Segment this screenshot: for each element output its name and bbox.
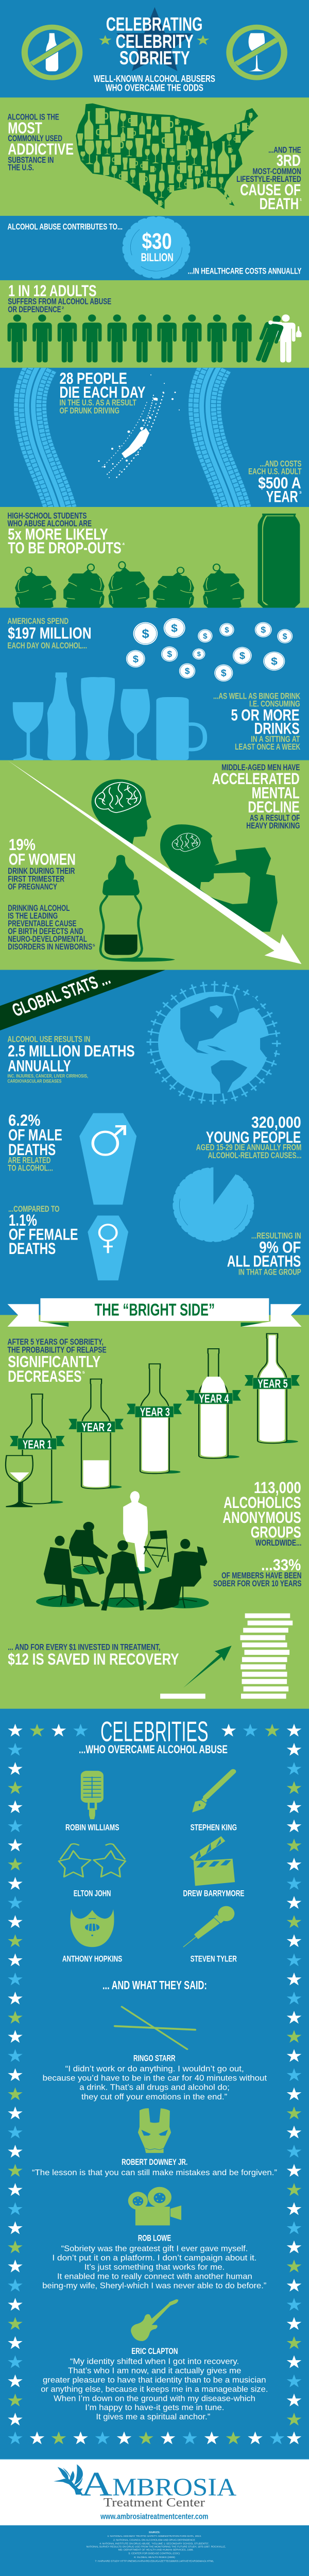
label: Drew Barrymore: DREW BARRYMORE — [183, 1888, 244, 1898]
panel: sources — [0, 2526, 309, 2576]
panel: healthcare costs — [0, 216, 309, 280]
quote: Eric Clapton — [41, 2346, 268, 2421]
text: 1 in 12 adults: 2 — [62, 306, 64, 310]
text: birth defects — [8, 903, 95, 952]
panel: celebrities — [0, 1709, 309, 2459]
text: male deaths: DEATHS — [8, 1140, 56, 1159]
icon: falling coins: $ — [167, 649, 173, 659]
icon: falling coins: $ — [197, 651, 201, 657]
text: 1 in 12 adults — [8, 281, 111, 314]
icon: microphone — [183, 1906, 234, 1947]
quote: Eric Clapton: ERIC CLAPTON — [131, 2346, 178, 2355]
text: 19 percent of women: DRINK DURING THEIR — [8, 866, 75, 876]
icon: falling coins: $ — [171, 622, 178, 635]
panel: header — [0, 0, 309, 97]
chart: bottle year 3 — [127, 1364, 182, 1473]
panel: logo — [0, 2459, 309, 2526]
quote: Rob Lowe: ROB LOWE — [138, 2233, 171, 2243]
text: most addictive: ADDICTIVE — [8, 140, 74, 158]
icon: vintage microphone — [81, 1771, 104, 1819]
label: Stephen King: STEPHEN KING — [191, 1823, 237, 1832]
arrow: mental decline — [8, 760, 301, 964]
label: Anthony Hopkins: ANTHONY HOPKINS — [62, 1954, 122, 1963]
quote: Rob Lowe: It enabled me to really connect with another human — [57, 2272, 252, 2281]
text: female deaths: DEATHS — [9, 1239, 56, 1258]
text: $197 million: EACH DAY ON ALCOHOL... — [8, 641, 87, 650]
icon: drinking head with small brain and bottle — [160, 824, 278, 931]
banner: the bright side: THE “BRIGHT SIDE” — [95, 1300, 215, 1319]
text: drop-outs: WHO ABUSE ALCOHOL ARE — [8, 518, 92, 528]
text: drop-outs: TO BE DROP-OUTS — [8, 538, 122, 557]
text: sources: 1: NATIONAL HIGHWAY TRAFFIC SAFETY ADMINISTRATION FARS DATA, 2013. — [108, 2535, 201, 2538]
quote: Eric Clapton: greater pleasure to have that identity than to be a musician — [43, 2375, 266, 2384]
icon: tire tracks — [30, 364, 235, 510]
text: most addictive — [8, 112, 74, 172]
text: most addictive: MOST — [8, 118, 42, 137]
chart: bottle year 5 — [245, 1334, 300, 1443]
text: 2.5 million deaths: CARDIOVASCULAR DISEASES — [8, 1079, 61, 1084]
icon: falling coins: $ — [203, 632, 208, 640]
panel: one in twelve adults — [0, 280, 309, 368]
icon: male coffin — [79, 1113, 136, 1205]
banner: the bright side — [8, 1298, 301, 1327]
text: website: www.ambrosiatreatmentcenter.com — [100, 2512, 208, 2521]
text: sources: 7: HARVARD STUDY HTTP://NEWS.HARVARD.EDU/GAZETTE/1996/03.14/FIVEYEARSISMAGI.HTML — [95, 2560, 214, 2563]
text: nine percent — [227, 1231, 301, 1277]
text: 19 percent of women: OF WOMEN — [9, 850, 76, 868]
panel: spending and binge drinking — [0, 608, 309, 760]
text: 19 percent of women: 19% — [9, 835, 36, 854]
text: accelerated mental decline — [212, 762, 300, 830]
text: female deaths: 1.1% — [9, 1211, 37, 1229]
text: drop-outs: 4 — [122, 542, 125, 546]
text: sources: 4: NATIONAL INSTITUTE ON DRUG ABUSE. “VOLUME 1: SECONDARY SCHOOL STUDENTS”, — [99, 2543, 210, 2545]
quote: Ringo Starr: a drink. That’s all drugs and alcohol do; — [79, 2083, 230, 2092]
text: 28 people die each day: OF DRUNK DRIVING — [60, 405, 119, 415]
icon: Iron Man mask — [138, 2108, 171, 2153]
frame of stars — [8, 1724, 301, 2444]
icon: broken glass splatter — [98, 375, 180, 478]
quote: Rob Lowe: “Sobriety was the greatest gift I ever gave myself. — [61, 2244, 248, 2253]
text: probability of relapse: DECREASES — [8, 1367, 81, 1385]
text: 1 in 12 adults: 1 IN 12 ADULTS — [8, 281, 96, 300]
text: birth defects: 5 — [93, 943, 95, 947]
icon: baby bottle — [100, 855, 175, 962]
text: 19 percent of women — [8, 835, 76, 891]
icon: falling coins: $ — [239, 651, 245, 662]
quote: Eric Clapton: “My identity shifted when I got into recovery. — [70, 2357, 239, 2366]
text: alcoholics anonymous — [222, 1478, 301, 1548]
chart: US map of drinks — [76, 104, 258, 209]
chart: bottle year 2: YEAR 2 — [81, 1420, 112, 1434]
text: $197 million: AMERICANS SPEND — [8, 616, 68, 625]
text: male deaths: TO ALCOHOL... — [8, 1163, 53, 1173]
text: most addictive: ALCOHOL IS THE — [8, 112, 59, 122]
text: 28 people die each day: IN THE U.S. AS A RESULT — [60, 398, 136, 408]
text: probability of relapse: SIGNIFICANTLY — [8, 1352, 100, 1371]
icon: crushed cans — [15, 562, 244, 608]
text: 2.5 million deaths — [8, 1035, 135, 1084]
icon: falling coins: $ — [271, 655, 278, 667]
icon: clapperboard — [190, 1836, 235, 1886]
text: 2.5 million deaths: INC. INJURIES, CANCER, LIVER CIRRHOSIS, — [8, 1074, 88, 1079]
text: drop-outs: 5x MORE LIKELY — [8, 524, 108, 543]
text: male deaths: OF MALE — [8, 1125, 62, 1144]
text: female deaths: ...COMPARED TO — [8, 1204, 60, 1214]
text: $30 billion — [141, 228, 174, 264]
quote: Ringo Starr: “I didn’t work or do anything. I wouldn’t go out, — [65, 2064, 244, 2073]
panel: global stats — [0, 968, 309, 1315]
text: probability of relapse — [8, 1337, 107, 1385]
text: most addictive: SUBSTANCE IN — [8, 155, 54, 165]
text: savings in recovery: ... AND FOR EVERY $1 INVESTED IN TREATMENT, — [8, 1642, 160, 1652]
subtitle: WELL-KNOWN ALCOHOL ABUSERS — [94, 74, 215, 84]
text: sources: MD: DEPARTMENT OF HEALTH AND HUMAN SERVICES, 1998. — [118, 2549, 194, 2551]
banner: global stats: GLOBAL STATS ... — [9, 968, 113, 1021]
text: sources: SOURCES: — [149, 2531, 160, 2534]
subtitle: WHO OVERCAME THE ODDS — [106, 82, 203, 93]
icon: falling coins: $ — [185, 666, 190, 676]
text: contributes to: ALCOHOL ABUSE CONTRIBUTES TO... — [8, 222, 123, 231]
quote: Robert Downey Jr.: ROBERT DOWNEY JR. — [122, 2157, 187, 2166]
icon: film camera — [128, 2187, 181, 2225]
icon: no bottle sign — [25, 27, 79, 78]
text: 19 percent of women: FIRST TRIMESTER — [8, 874, 64, 884]
icon: support group silhouettes — [36, 1491, 209, 1611]
icon: row of drinks — [13, 672, 205, 760]
text: $500 a year: 3 — [299, 490, 302, 495]
icon: hummingbird — [54, 2464, 83, 2495]
title — [106, 13, 202, 69]
icon: falling coins — [126, 618, 293, 682]
text: female deaths: OF FEMALE — [9, 1225, 78, 1244]
icon: falling coins: $ — [261, 625, 266, 635]
text: 2.5 million deaths: ALCOHOL USE RESULTS IN — [8, 1035, 90, 1044]
text: most addictive: THE U.S. — [8, 163, 34, 172]
quote: Eric Clapton: That’s who I am now, and it actually gives me — [68, 2366, 241, 2375]
text: binge drinking — [213, 691, 301, 752]
text: probability of relapse: 5 — [82, 1370, 85, 1375]
icon: no wine glass sign — [229, 27, 284, 78]
arrow: growth — [183, 1646, 232, 1688]
title: CELEBRATING — [106, 13, 202, 35]
text: birth defects: PREVENTABLE CAUSE — [8, 919, 76, 928]
icon: wine glass — [6, 1455, 33, 1507]
text: male deaths — [8, 1111, 62, 1173]
text: thirty-three percent — [213, 1555, 301, 1588]
text: birth defects: IS THE LEADING — [8, 911, 58, 921]
text: female deaths — [8, 1204, 78, 1258]
quote: Rob Lowe: being-my wife, Sheryl-which I was never able to do before.” — [42, 2281, 267, 2290]
text: savings in recovery: $12 IS SAVED IN RECOVERY — [8, 1650, 179, 1668]
label: Robin Williams: ROBIN WILLIAMS — [65, 1823, 119, 1832]
quote: Robert Downey Jr. — [32, 2157, 277, 2177]
panel: drunk driving — [0, 364, 309, 510]
subtitle — [94, 74, 215, 93]
text: $500 a year — [248, 459, 302, 506]
icon: star glasses — [59, 1844, 126, 1877]
quote: Ringo Starr: RINGO STARR — [133, 2053, 176, 2063]
text: probability of relapse: THE PROBABILITY OF RELAPSE — [8, 1345, 107, 1354]
text: birth defects: NEURO-DEVELOPMENTAL — [8, 934, 87, 944]
quote: Robert Downey Jr.: “The lesson is that you can still make mistakes and be forgiven.” — [32, 2168, 277, 2177]
icon: electric guitar — [131, 2299, 178, 2341]
text: 2.5 million deaths: 2.5 MILLION DEATHS — [8, 1041, 135, 1060]
quote: Eric Clapton: or anything else, because it keeps me in a manageable size. — [41, 2384, 268, 2394]
text: sources: 5: CENTER FOR DISEASE CONTROL (CDC) — [128, 2552, 180, 2555]
logo: Ambrosia Treatment Center: Treatment Center — [104, 2495, 205, 2509]
text: birth defects: DRINKING ALCOHOL — [8, 903, 70, 913]
quote: Eric Clapton: It gives me a spiritual anchor.” — [96, 2412, 211, 2421]
chart: bottle year 1 — [10, 1394, 65, 1504]
title: CELEBRITY — [116, 30, 194, 52]
quote: Rob Lowe — [42, 2233, 267, 2290]
text: 2.5 million deaths: ANNUALLY — [8, 1056, 71, 1075]
icon: Hannibal mask — [70, 1909, 114, 1947]
panel: mental decline and pregnancy — [0, 760, 309, 970]
text: male deaths: 6.2% — [8, 1111, 40, 1129]
icon: falling coins: $ — [225, 626, 229, 634]
icon: falling coins: $ — [283, 632, 287, 641]
panel: addictive substance — [0, 97, 309, 216]
chart: row of people — [8, 314, 252, 362]
text: savings in recovery — [8, 1642, 179, 1668]
logo: Ambrosia Treatment Center: A — [81, 2465, 112, 2503]
text: 28 people die each day: DIE EACH DAY — [60, 383, 145, 401]
text: most addictive: COMMONLY USED — [8, 133, 62, 143]
chart: stacks of bills — [160, 1614, 293, 1699]
text: drop-outs: HIGH-SCHOOL STUDENTS — [8, 511, 87, 520]
text: sources: 6: GLOBAL HEALTH RISKS (2009) — [134, 2556, 175, 2559]
text: male deaths: ARE RELATED — [8, 1156, 50, 1165]
quote: Ringo Starr: because you’d have to be in the car for 40 minutes without — [43, 2074, 267, 2082]
panel: bright side — [0, 1298, 309, 1709]
text: sources: NATIONAL SURVEY RESULTS ON DRUG USE FROM THE MONITORING THE FUTURE STUDY, 1975-1997. ROCKVILLE, — [87, 2546, 226, 2548]
logo: Ambrosia Treatment Center — [81, 2465, 237, 2509]
banner: global stats — [0, 968, 165, 1030]
icon: falling coins: $ — [142, 626, 149, 641]
text: 1 in 12 adults: SUFFERS FROM ALCOHOL ABUSE — [8, 296, 111, 306]
title: SOBRIETY — [119, 47, 190, 69]
text: 19 percent of women: OF PREGNANCY — [8, 882, 57, 891]
icon: bottle cap — [125, 219, 187, 276]
chart: bottle year 1: YEAR 1 — [23, 1437, 52, 1451]
text: drop-outs — [8, 511, 125, 557]
text: sources: 2: NATIONAL COUNCIL ON ALCOHOLISM AND DRUG DEPENDENCE — [113, 2539, 195, 2541]
text: birth defects: DISORDERS IN NEWBORNS — [8, 942, 92, 952]
text: $197 million: $197 MILLION — [8, 623, 92, 642]
icon: drunk person helped by friend — [251, 313, 301, 364]
icon: small stars — [99, 35, 209, 45]
icon: healthy head with brain — [91, 779, 151, 844]
chart: bottle year 4: YEAR 4 — [199, 1392, 229, 1405]
quote: Eric Clapton: When I’m down on the ground with my disease-which — [54, 2394, 255, 2403]
panel: high-school students — [0, 507, 309, 608]
quote: Rob Lowe: I don’t put it on a platform. I don’t campaign about it. — [52, 2253, 257, 2262]
icon: title star — [116, 7, 193, 71]
icon: female coffin — [88, 1215, 128, 1280]
text: third cause of death — [236, 145, 302, 213]
text: $30 billion: BILLION — [141, 251, 174, 264]
quote: Ringo Starr — [43, 2053, 267, 2101]
text: $30 billion: $30 — [142, 228, 172, 254]
text: $197 million — [8, 616, 92, 650]
chart: bottle year 2 — [68, 1379, 124, 1489]
quote: Ringo Starr: they cut off your emotions in the end.” — [81, 2092, 227, 2101]
label: Elton John: ELTON JOHN — [74, 1888, 111, 1898]
icon: falling coins: $ — [133, 654, 139, 665]
label: Steven Tyler: STEVEN TYLER — [191, 1954, 237, 1963]
icon: drumsticks — [115, 2007, 195, 2049]
icon: fountain pen — [192, 1771, 233, 1812]
text: birth defects: OF BIRTH DEFECTS AND — [8, 926, 83, 936]
chart: bottle cap pie — [176, 1160, 251, 1239]
icon: standing can — [258, 514, 300, 608]
heading: what they said: ... AND WHAT THEY SAID: — [102, 1979, 207, 1992]
icon: falling coins: $ — [221, 668, 227, 679]
text: 28 people die each day: 28 PEOPLE — [60, 369, 127, 387]
chart: bottle year 4 — [186, 1349, 241, 1459]
text: young people — [196, 1113, 301, 1160]
text: sources — [87, 2531, 226, 2563]
icon: globe with crosses — [150, 985, 277, 1101]
text: 1 in 12 adults: OR DEPENDENCE — [8, 304, 61, 314]
text: third cause of death: 1 — [300, 197, 302, 201]
quote: Eric Clapton: I’m happy to have-it gets me in tune. — [85, 2403, 224, 2412]
text: probability of relapse: AFTER 5 YEARS OF SOBRIETY, — [8, 1337, 104, 1347]
logo: Ambrosia Treatment Center: MBROSIA — [112, 2473, 237, 2501]
chart: bottle year 3: YEAR 3 — [140, 1405, 170, 1419]
text: 28 people die each day — [60, 369, 145, 415]
quote: Rob Lowe: It’s just something that works for me. — [84, 2262, 225, 2272]
